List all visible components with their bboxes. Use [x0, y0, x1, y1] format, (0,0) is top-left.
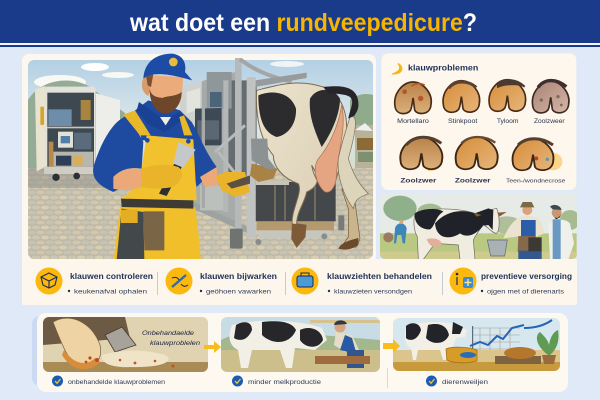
bucket	[487, 240, 507, 256]
step: preventieve versorging: ojgen met of dierenarts	[487, 288, 565, 296]
icon: check	[232, 376, 243, 386]
step: preventieve versorging: preventieve versorging	[481, 271, 572, 281]
callout	[142, 330, 200, 347]
caption: onbehandelde klauwproblemen	[52, 376, 165, 386]
chart	[470, 320, 552, 352]
panel: klauwproblemen	[381, 53, 576, 190]
arrow	[383, 339, 400, 353]
man	[93, 54, 250, 262]
callout: klauwproblelen	[150, 340, 200, 347]
hoof: Zoolzweer	[532, 80, 569, 125]
crush frame	[180, 58, 344, 249]
hoof: Tyloom	[489, 80, 526, 125]
hoof: Tyloom: Tyloom	[497, 119, 519, 125]
caption: onbehandelde klauwproblemen: onbehandelde klauwproblemen	[68, 379, 165, 386]
icon: check	[426, 376, 437, 386]
hoof: Zoolzwer 2: Zoolzwer	[455, 178, 491, 185]
cow	[405, 322, 467, 360]
van	[35, 86, 120, 181]
hoof: Zoolzweer: Zoolzweer	[534, 119, 565, 125]
step: klauwen bijwarken	[166, 268, 277, 296]
arrow	[204, 341, 221, 353]
panel: main illustration	[22, 54, 376, 264]
panel: action strip	[22, 259, 577, 305]
cow	[414, 208, 507, 259]
step: klauwen bijwarken: geöhoen vawarken	[206, 288, 271, 296]
heading: klauwproblemen	[408, 63, 478, 73]
step: klauwziehten behandelen: klauwzieten versondgen	[334, 288, 412, 296]
hoof: Stinkpoot: Stinkpoot	[448, 119, 478, 125]
step: klauwen controleren: keukenafval ophalen	[74, 288, 147, 296]
step: klauwen controleren	[36, 268, 153, 296]
caption: minder melkproductie	[232, 376, 321, 386]
illustration: cow with farmer and vet	[380, 193, 580, 259]
hoof: Zoolzwer 1: Zoolzwer	[400, 178, 437, 185]
icon: check	[52, 376, 63, 386]
hoof: Zoolzwer 2	[455, 137, 498, 185]
icon: medical bag	[292, 268, 318, 294]
hoof: Teen-/wondnecrose	[506, 139, 565, 184]
illustration: untreated hoof	[43, 317, 208, 372]
icon: crescent	[392, 63, 402, 74]
title banner	[0, 0, 600, 47]
vet	[548, 205, 574, 259]
hoof: Stinkpoot	[443, 81, 480, 125]
caption: minder melkproductie: minder melkproductie	[248, 379, 321, 386]
step: klauwziehten behandelen	[292, 268, 432, 296]
illustration: hoof trimmer with cow	[28, 54, 373, 262]
caption: dierenweiljen	[426, 376, 488, 386]
illustration: lower milk production	[221, 317, 380, 372]
farmer	[334, 320, 364, 368]
step: preventieve versorging	[450, 268, 572, 296]
title: wat doet een rundveepedicure?	[129, 9, 477, 37]
cow	[250, 83, 368, 250]
icon: tools	[166, 268, 192, 294]
illustration: culling and economic loss	[393, 318, 560, 371]
hoof: Mortellaro	[395, 82, 431, 125]
step: klauwen bijwarken: klauwen bijwarken	[200, 271, 277, 281]
callout: Onbehandaelde	[142, 330, 194, 337]
step: klauwen controleren: klauwen controleren	[70, 271, 153, 281]
hoof: Zoolzwer 1	[400, 137, 442, 185]
hoof: Mortellaro: Mortellaro	[397, 119, 430, 125]
caption: dierenweiljen: dierenweiljen	[442, 379, 488, 386]
farmer	[503, 202, 544, 259]
icon: box	[36, 268, 62, 294]
hoof: Teen-/wondnecrose: Teen-/wondnecrose	[506, 178, 565, 184]
icon: bottle with cross	[450, 268, 476, 294]
step: klauwziehten behandelen: klauwziehten behandelen	[327, 271, 432, 281]
panel: consequences	[32, 313, 568, 392]
